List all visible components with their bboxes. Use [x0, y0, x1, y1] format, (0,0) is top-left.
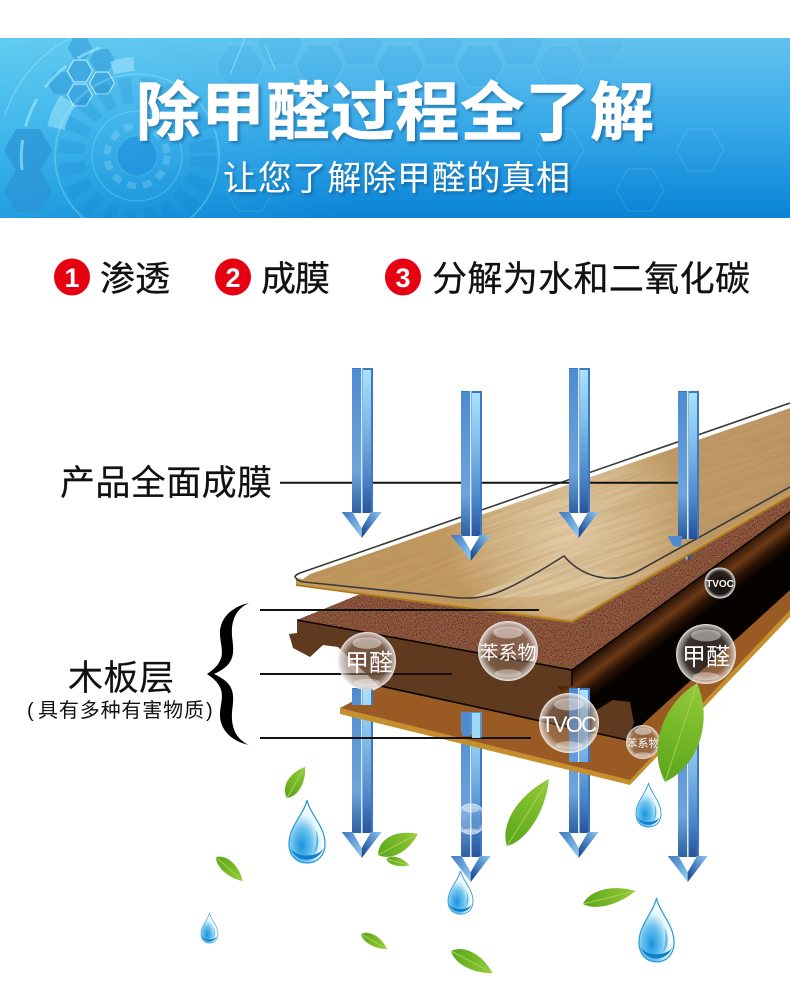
bottom slab	[340, 587, 790, 785]
face edge lines	[381, 670, 627, 740]
bubble: benzene centre	[478, 621, 538, 681]
bubble: TVOC small	[704, 568, 736, 598]
arrow segments over slab	[352, 688, 590, 836]
wood top surface	[302, 408, 790, 620]
bubble: formaldehyde left	[338, 632, 396, 690]
falling leaves	[212, 763, 637, 979]
label: harmful substances note: )	[206, 700, 213, 722]
label: harmful substances note: (	[27, 700, 34, 722]
leaf: large	[646, 677, 716, 788]
dark side groove	[558, 512, 790, 733]
step 2	[215, 258, 330, 299]
label: film: 产品全面成膜	[60, 464, 272, 503]
step 2: 2	[225, 263, 241, 293]
protective film	[295, 403, 790, 598]
top arrows	[342, 368, 699, 561]
bubble: benzene small: 苯系物	[626, 736, 660, 750]
step 3: 3	[395, 263, 411, 293]
lower arrows	[342, 688, 708, 882]
cork layer	[290, 490, 790, 675]
callout lines	[260, 483, 680, 738]
bubble: benzene small	[626, 725, 660, 759]
title: 除甲醛过程全了解	[136, 77, 654, 149]
veneer layer	[296, 487, 790, 623]
bubble: TVOC centre	[539, 693, 599, 753]
water drops	[201, 783, 674, 962]
bubble: benzene centre: 苯系物	[479, 642, 537, 664]
dark hexagons	[4, 37, 114, 212]
hexagon pattern	[216, 23, 724, 211]
banner	[0, 38, 790, 218]
step 1	[54, 258, 170, 299]
brace	[207, 603, 249, 745]
subtitle: 让您了解除甲醛的真相	[223, 160, 570, 198]
arrow 4 head behind board	[668, 391, 708, 561]
bubble: formaldehyde right	[676, 624, 736, 684]
bubble: formaldehyde right: 甲醛	[682, 644, 730, 671]
step 1: 渗透	[100, 260, 170, 299]
label: wood layers: 木板层	[68, 659, 174, 698]
bubble: formaldehyde left: 甲醛	[345, 650, 393, 677]
label: harmful substances note: 具有多种有害物质	[38, 699, 204, 722]
gear graphic	[4, 38, 276, 218]
step 3: 分解为水和二氧化碳	[432, 260, 750, 299]
brown core face	[289, 620, 634, 740]
step 2: 成膜	[261, 260, 330, 299]
bubble: TVOC centre: TVOC	[541, 712, 597, 737]
bubble: clear	[456, 804, 486, 834]
step 1: 1	[64, 263, 80, 293]
bubble: TVOC small: TVOC	[706, 579, 734, 590]
